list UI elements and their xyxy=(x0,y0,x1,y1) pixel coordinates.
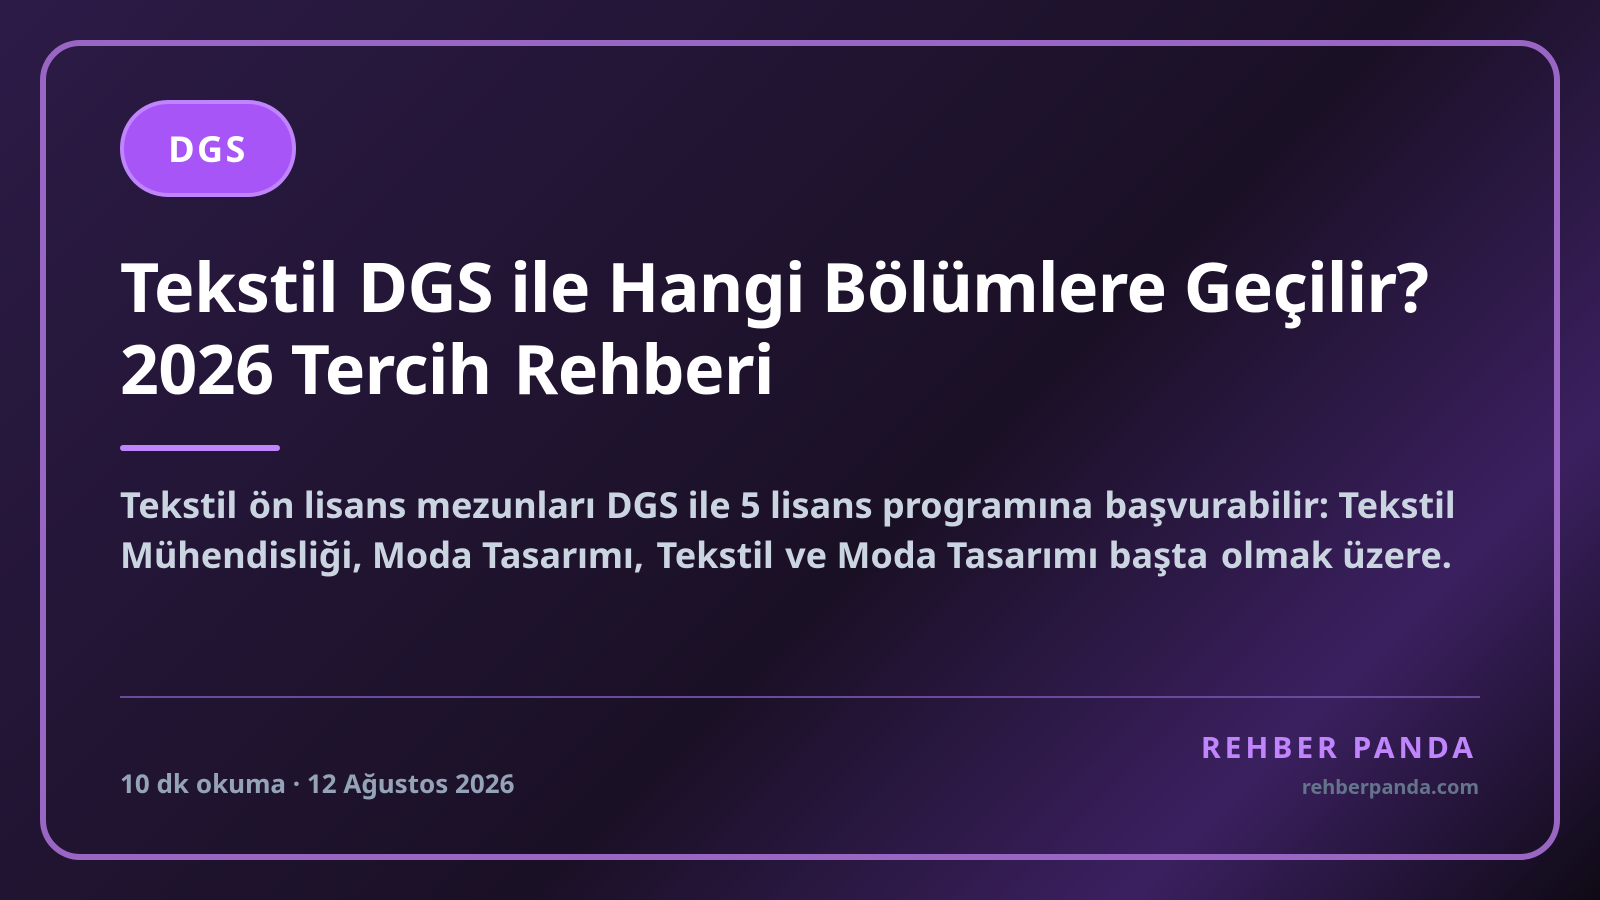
accent line xyxy=(120,445,280,451)
footer divider xyxy=(120,696,1480,698)
description xyxy=(120,480,1456,579)
category badge xyxy=(120,100,296,197)
description: Tekstil ön lisans mezunları DGS ile 5 lisans programına başvurabilir: Tekstil xyxy=(120,480,1456,529)
title xyxy=(120,239,1428,414)
brand name: REHBER PANDA xyxy=(1201,726,1477,767)
reading time and date: 10 dk okuma · 12 Ağustos 2026 xyxy=(120,765,515,801)
title: 2026 Tercih Rehberi xyxy=(120,321,774,414)
website: rehberpanda.com xyxy=(1302,773,1479,800)
title: Tekstil DGS ile Hangi Bölümlere Geçilir? xyxy=(120,239,1428,332)
category badge: DGS xyxy=(168,124,248,173)
description: Mühendisliği, Moda Tasarımı, Tekstil ve Moda Tasarımı başta olmak üzere. xyxy=(120,530,1452,579)
